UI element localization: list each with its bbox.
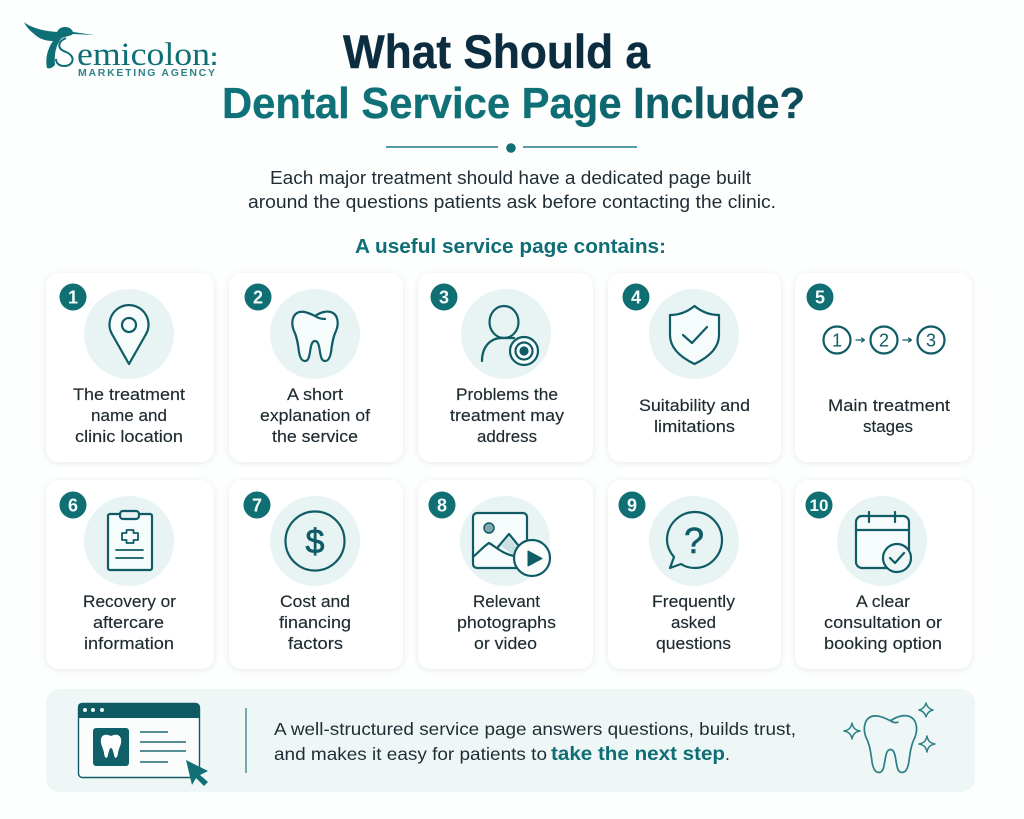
icon: dollar coin xyxy=(286,512,344,570)
panel: bottom callout banner xyxy=(46,689,975,792)
panel: card 8: 8 xyxy=(437,496,447,516)
panel: card 5: 5 xyxy=(815,288,825,308)
panel: card 9: questions xyxy=(656,635,731,653)
section heading: A useful service page contains: xyxy=(355,235,666,258)
panel: card 2: 2 xyxy=(253,288,263,308)
panel: card 6 xyxy=(46,480,214,669)
logo: Semicolon Marketing Agency xyxy=(24,22,218,79)
panel: card 9 xyxy=(608,480,781,669)
panel: card 6: information xyxy=(84,635,174,653)
panel: card 2 xyxy=(229,273,403,462)
panel: card 5: stages xyxy=(863,418,913,436)
panel: card 6: Recovery or xyxy=(83,593,177,611)
panel: card 4 xyxy=(608,273,781,462)
logo: Semicolon Marketing Agency: MARKETING AGENCY xyxy=(78,67,215,79)
subtitle xyxy=(248,168,776,212)
logo: Semicolon Marketing Agency: emicolon xyxy=(77,37,210,73)
panel: card 6: aftercare xyxy=(93,614,164,632)
panel: card 4: Suitability and xyxy=(639,397,750,415)
callout text xyxy=(274,719,796,765)
icon: three stage flow: 3 xyxy=(926,330,936,350)
panel: card 8: or video xyxy=(474,635,537,653)
panel: card 9: asked xyxy=(671,614,716,632)
panel: card 8 xyxy=(418,480,593,669)
panel: card 1: 1 xyxy=(68,288,78,308)
callout text: A well-structured service page answers questions, builds trust, xyxy=(274,719,796,739)
icon: cursor arrow xyxy=(186,760,208,786)
panel: card 3 xyxy=(418,273,593,462)
panel: card 8: Relevant xyxy=(473,593,540,611)
title: What Should a xyxy=(343,25,651,78)
panel: card 10: consultation or xyxy=(824,614,943,632)
callout text: . xyxy=(725,744,730,764)
panel: card 9: Frequently xyxy=(652,593,736,611)
panel: card 10: booking option xyxy=(824,635,942,653)
icon: question speech bubble xyxy=(667,512,722,568)
panel: card 7: factors xyxy=(288,635,343,653)
panel: card 6: 6 xyxy=(68,496,78,516)
panel: card 4: 4 xyxy=(631,288,641,308)
icon: map pin xyxy=(110,305,148,364)
icon: three stage flow xyxy=(824,326,944,354)
icon: browser window with tooth xyxy=(78,703,208,786)
panel: card 1 xyxy=(46,273,214,462)
title: Dental Service Page Include? xyxy=(222,79,805,128)
icon: question speech bubble: ? xyxy=(684,520,704,561)
panel: card 10: A clear xyxy=(856,593,911,611)
icon: person with target xyxy=(482,306,538,365)
panel: card 7 xyxy=(229,480,403,669)
panel: card 3: treatment may xyxy=(450,407,565,425)
panel: card 7: 7 xyxy=(252,496,262,516)
icon: sparkling tooth xyxy=(844,703,935,772)
panel: card 7: financing xyxy=(279,614,351,632)
logo: Semicolon Marketing Agency: : xyxy=(210,44,218,71)
icon: shield with check xyxy=(670,306,719,364)
panel: card 3: Problems the xyxy=(456,386,558,404)
panel: card 4: limitations xyxy=(654,418,735,436)
icon: photo with play button xyxy=(473,513,550,576)
panel: card 2: explanation of xyxy=(260,407,370,425)
panel: card 1: clinic location xyxy=(75,428,183,446)
panel: card 3: address xyxy=(477,428,537,446)
panel: card 8: photographs xyxy=(457,614,556,632)
icon: dollar coin: $ xyxy=(306,523,325,561)
panel: card 1: name and xyxy=(91,407,167,425)
panel: card 10 xyxy=(795,480,972,669)
icon: medical clipboard xyxy=(108,511,152,570)
panel: card 10: 10 xyxy=(810,496,828,515)
icon: three stage flow: 2 xyxy=(879,330,889,350)
icon: calendar with check xyxy=(856,512,911,572)
panel: card 7: Cost and xyxy=(280,593,350,611)
panel: card 1: The treatment xyxy=(73,386,185,404)
title xyxy=(222,25,805,128)
icon: three stage flow: 1 xyxy=(832,330,842,350)
panel: card 5: Main treatment xyxy=(828,397,950,415)
title divider xyxy=(386,143,637,153)
panel: card 2: A short xyxy=(287,386,343,404)
callout text: take the next step xyxy=(551,744,725,765)
subtitle: around the questions patients ask before contacting the clinic. xyxy=(248,192,776,212)
panel: card 5 xyxy=(795,273,972,462)
panel: card 9: 9 xyxy=(627,496,637,516)
subtitle: Each major treatment should have a dedicated page built xyxy=(270,168,751,188)
panel: card 3: 3 xyxy=(439,288,449,308)
callout text: and makes it easy for patients to xyxy=(274,744,547,764)
panel: card 2: the service xyxy=(272,428,358,446)
icon: tooth xyxy=(292,312,338,361)
